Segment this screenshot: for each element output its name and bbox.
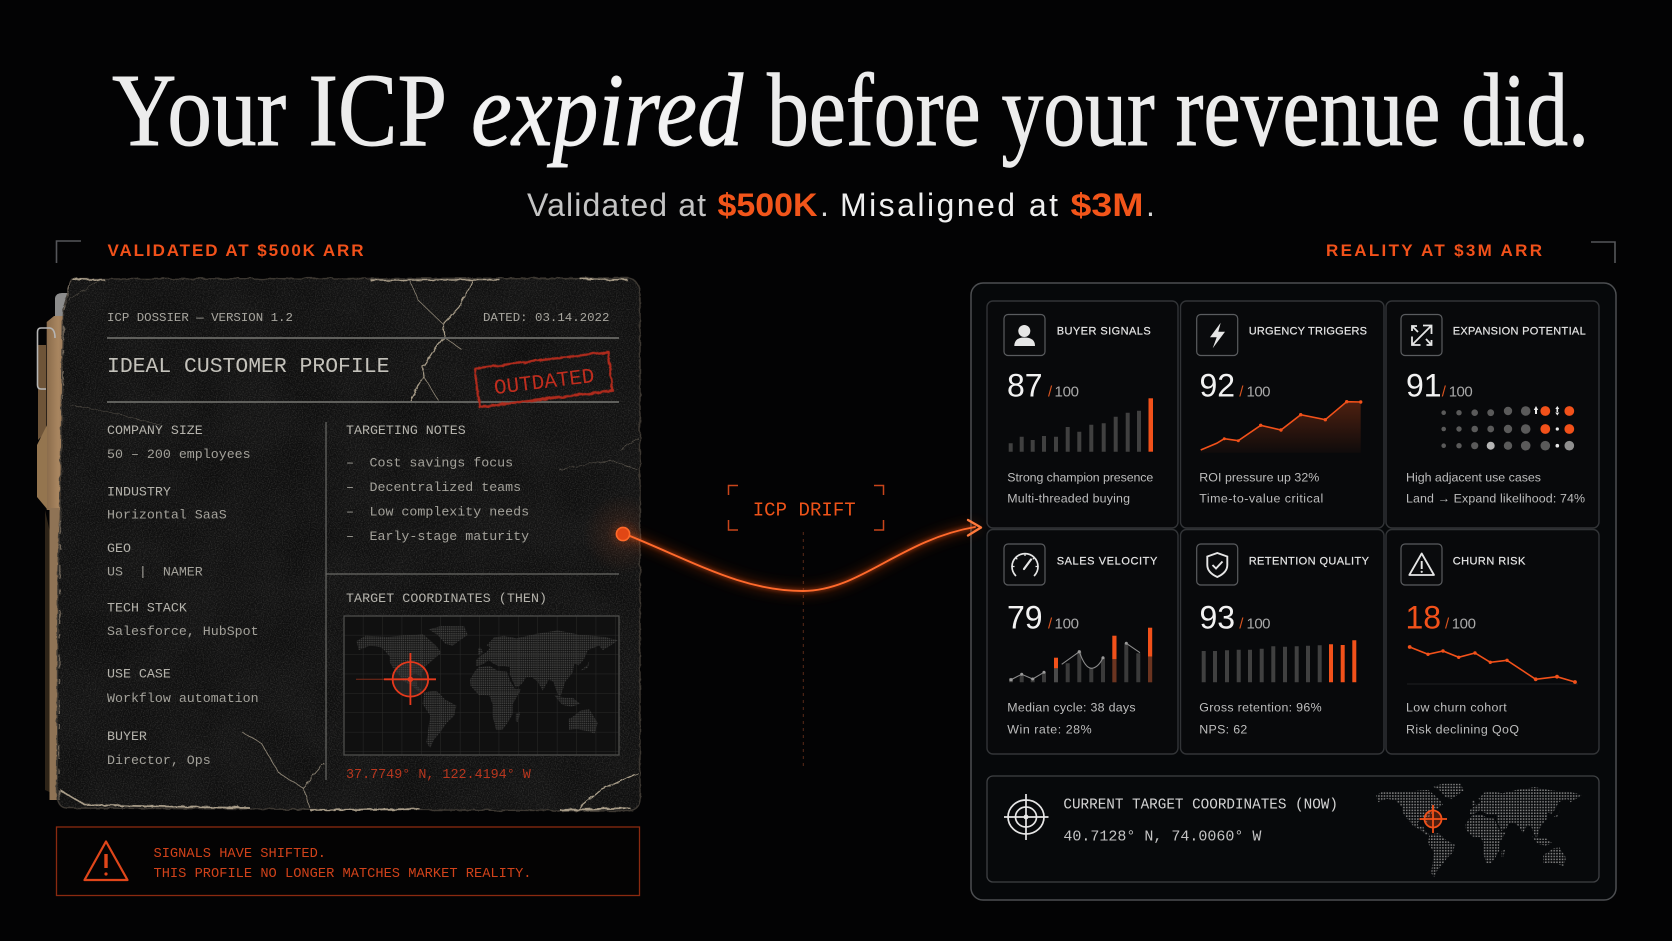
bar chart [1009,398,1153,452]
card: buyer signals: Strong champion presence [1007,470,1153,484]
score: / [1239,384,1244,401]
score: / [1445,615,1450,632]
score: / [1442,384,1447,401]
profile fields: GEO [107,541,131,556]
card: sales velocity: Win rate: 28% [1007,722,1092,736]
card: expansion potential: EXPANSION POTENTIAL [1453,326,1586,338]
subtitle: . [820,187,829,223]
score: 18 [1406,599,1441,635]
arrow: drift curve [616,520,981,591]
label: ICP drift: ICP DRIFT [753,500,856,522]
targeting notes: – [346,480,354,495]
score: 100 [1246,384,1270,401]
label: ICP drift [728,486,884,770]
score [1007,599,1079,635]
profile fields [107,423,259,768]
section label: reality: REALITY AT $3M ARR [1326,241,1542,260]
targeting notes: TARGETING NOTES [346,423,466,438]
icon: reticle now [1004,794,1048,840]
subtitle: $3M [1070,187,1144,223]
icon: bolt [1197,314,1238,356]
target coordinates (then): 37.7749° N, 122.4194° W [346,768,532,783]
score: 100 [1246,615,1270,632]
divider lines [107,338,619,780]
targeting notes: Low complexity needs [370,504,529,520]
card: sales velocity: Median cycle: 38 days [1007,701,1136,715]
bar chart [1202,640,1356,682]
worn edges and cracks [57,278,640,811]
panel: ICP dossier [50,270,663,820]
targeting notes: – [346,504,354,520]
score: / [1048,384,1053,401]
score: 87 [1007,368,1043,404]
targeting notes: Decentralized teams [370,480,521,495]
callout: signals shifted: SIGNALS HAVE SHIFTED. [154,847,326,862]
card: churn risk: Risk declining QoQ [1406,722,1519,736]
card: urgency triggers: Time-to-value critical [1199,491,1323,505]
score [1200,368,1270,404]
bar and line chart [1009,628,1152,682]
subtitle: . [1146,187,1155,223]
score [1007,368,1079,404]
stamp: outdated: OUTDATED [493,366,596,401]
profile fields: USE CASE [107,666,171,682]
map: world now [1376,784,1582,877]
card: sales velocity [987,530,1178,754]
subtitle: Misaligned at [840,187,1058,223]
score [1406,368,1473,404]
profile fields: BUYER [107,729,147,744]
callout: signals shifted: THIS PROFILE NO LONGER MATCHES MARKET REALITY. [154,867,532,882]
callout: signals shifted [56,827,640,896]
profile fields: Salesforce, HubSpot [107,624,259,639]
section label: validated: VALIDATED AT $500K ARR [108,241,364,260]
icon: warning [1401,544,1442,585]
dot matrix chart [1441,406,1574,451]
dossier header [107,311,609,325]
title: expired [471,53,744,168]
icon: reticle then [356,653,436,705]
icon: paperclip [38,328,55,389]
icon: gauge [1004,544,1045,585]
target coordinates (then): TARGET COORDINATES (THEN) [346,591,547,606]
score [1406,599,1476,635]
panel: current target coordinates [987,776,1599,882]
card: retention quality: Gross retention: 96% [1199,701,1322,715]
targeting notes [346,423,529,544]
subtitle [527,187,1155,223]
title [112,53,1589,168]
panel: current target coordinates: CURRENT TARGET COORDINATES (NOW) [1063,797,1338,813]
profile fields: US | NAMER [107,564,203,580]
icon: warning triangle [84,842,128,880]
dossier paper [50,270,663,820]
card: retention quality [1180,530,1384,754]
profile fields: 50 – 200 employees [107,447,251,462]
origin dot [616,527,630,541]
icon: person [1004,314,1045,356]
panel: reality dashboard [971,283,1616,900]
card: churn risk [1386,530,1599,754]
card: retention quality: RETENTION QUALITY [1249,555,1370,567]
targeting notes: Cost savings focus [370,456,513,470]
profile fields: Workflow automation [107,691,259,706]
target coordinates (then) [344,591,619,783]
icon: shield [1197,544,1238,585]
panel: current target coordinates: 40.7128° N, 74.0060° W [1063,829,1261,846]
dossier header: DATED: 03.14.2022 [483,311,609,325]
card: expansion potential: High adjacent use cases [1406,470,1541,484]
icon: reticle on map [1420,805,1447,833]
icon: expand [1401,314,1442,356]
map: world then [344,616,619,755]
score [1200,599,1270,635]
title: Your ICP [112,53,447,168]
card: churn risk: CHURN RISK [1453,555,1526,567]
card: sales velocity: SALES VELOCITY [1057,555,1158,567]
folder behind dossier [37,293,70,800]
card: buyer signals [987,301,1178,528]
card: churn risk: Low churn cohort [1406,701,1507,715]
targeting notes: – [346,529,354,544]
score: 91 [1406,368,1442,404]
dossier title: IDEAL CUSTOMER PROFILE [107,355,389,379]
card: expansion potential: Land → Expand likelihood: 74% [1406,491,1585,505]
subtitle: $500K [718,187,818,223]
profile fields: INDUSTRY [107,484,171,500]
profile fields: Director, Ops [107,753,211,768]
card: expansion potential [1386,301,1599,528]
score: 100 [1452,615,1476,632]
card: buyer signals: Multi-threaded buying [1007,491,1130,505]
subtitle: Validated at [527,187,706,223]
section label: reality [1326,241,1615,263]
targeting notes: Early-stage maturity [370,529,529,544]
stamp: outdated [475,352,613,407]
score: 100 [1449,384,1473,401]
line chart [1407,645,1578,684]
targeting notes: – [346,456,354,470]
card: urgency triggers: ROI pressure up 32% [1199,470,1319,484]
score: 100 [1054,615,1079,632]
dossier header: ICP DOSSIER — VERSION 1.2 [107,311,293,325]
profile fields: TECH STACK [107,600,187,616]
area line chart [1201,400,1362,453]
score: 100 [1054,384,1079,401]
score: / [1239,615,1244,632]
profile fields: Horizontal SaaS [107,508,227,522]
card: buyer signals: BUYER SIGNALS [1057,326,1151,338]
score: 79 [1007,599,1043,635]
card: urgency triggers [1180,301,1384,528]
score: 92 [1200,368,1235,404]
score: / [1048,615,1053,632]
card: retention quality: NPS: 62 [1199,722,1247,736]
card: urgency triggers: URGENCY TRIGGERS [1249,326,1367,338]
arrowhead [968,520,981,536]
score: 93 [1200,599,1235,635]
profile fields: COMPANY SIZE [107,423,203,438]
